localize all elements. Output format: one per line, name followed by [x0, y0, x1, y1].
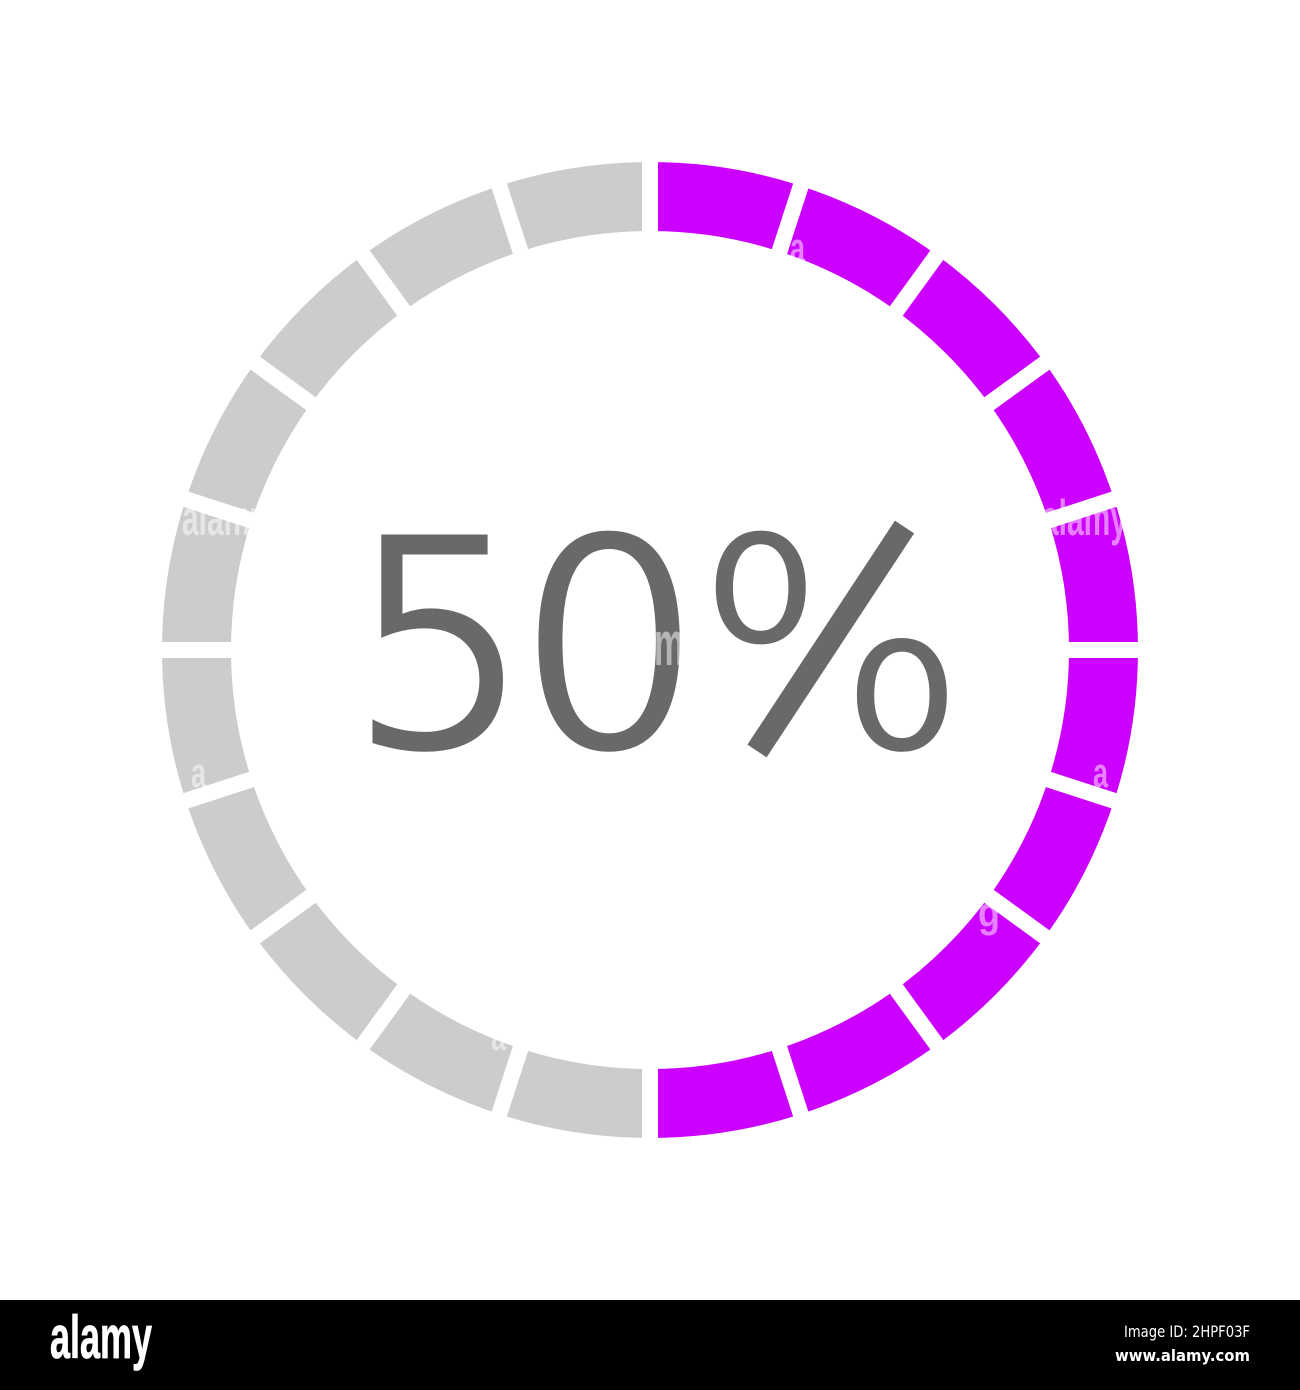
stock watermark fragments: a	[1093, 749, 1108, 796]
website: www.alamy.com	[1115, 1346, 1250, 1365]
stock watermark fragments: a	[191, 749, 206, 796]
image id: Image ID: 2HPF03F	[1124, 1322, 1250, 1341]
stock watermark fragments: alamy	[1042, 490, 1127, 546]
stock watermark fragments: alamy	[182, 490, 267, 546]
footer bar	[0, 1300, 1300, 1390]
stock watermark fragments	[182, 224, 1127, 1059]
progress ring: remaining grey half	[197, 196, 650, 1104]
stock watermark fragments: a	[790, 224, 805, 271]
progress ring: filled purple half	[650, 196, 1104, 1104]
footer logo: alamy	[50, 1304, 152, 1371]
percentage value: %	[698, 474, 965, 821]
stock watermark fragments: a	[491, 1012, 506, 1059]
percentage value	[372, 520, 947, 758]
percentage value: 5	[348, 473, 530, 821]
percentage value: 0	[517, 474, 701, 821]
stock watermark fragments: g	[978, 889, 1000, 936]
stock watermark fragments: m	[654, 610, 684, 679]
